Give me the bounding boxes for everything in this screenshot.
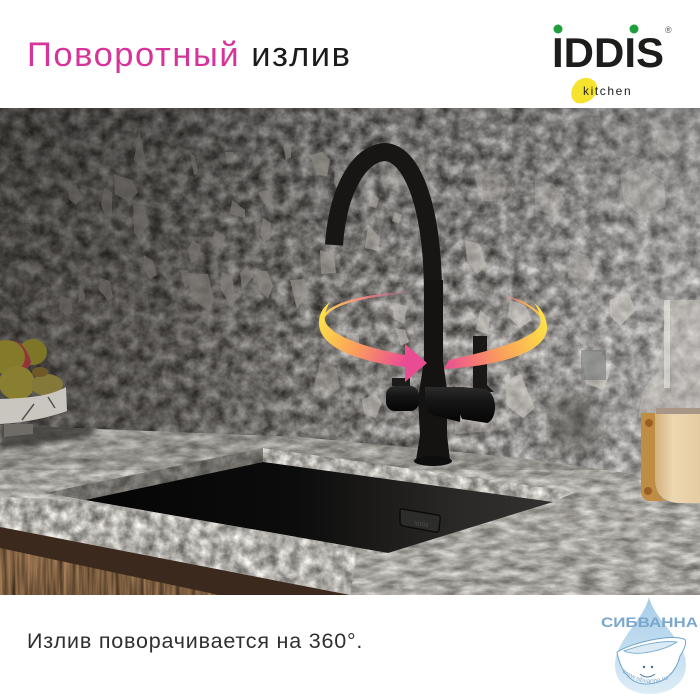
title: Поворотный излив: [27, 36, 351, 74]
ring back right: [508, 297, 544, 322]
logo green dots: [554, 24, 638, 34]
pears and apple: [0, 339, 63, 400]
dark wood cabinet band: [0, 527, 350, 595]
countertop shadow by the bowl: [0, 425, 98, 452]
grey tile fragment: [581, 350, 606, 380]
faucet: [334, 152, 495, 466]
jar contents: [656, 408, 700, 424]
left knob: [386, 378, 419, 411]
sink basin: [85, 462, 553, 553]
right arrow: [444, 303, 547, 369]
photo: kitchen scene: [0, 108, 700, 595]
countertop: [0, 425, 700, 595]
jar glass: [638, 300, 700, 418]
rivets: [644, 419, 653, 495]
fruit bowl: [0, 339, 67, 437]
yellow spot: [571, 78, 597, 103]
logo: IDDIS kitchen: [552, 24, 672, 103]
glass jar with leather strap: [638, 300, 700, 503]
faucet spout: [334, 152, 433, 290]
faucet column: [416, 280, 450, 460]
rotation arrow ring: [319, 292, 547, 382]
logo wordmark: IDDIS: [552, 29, 664, 76]
brand name: СИБВАННА: [601, 615, 698, 630]
registered mark: ®: [665, 25, 672, 35]
marble veins: [22, 397, 55, 420]
right lever: [473, 336, 494, 392]
sink drain plate: [400, 509, 440, 532]
water drop: [615, 597, 686, 694]
right handle body: [425, 387, 462, 422]
sink rear edge: [263, 448, 576, 502]
light wood cabinet: [0, 548, 219, 595]
watermark: Sibvanna logo: [601, 597, 698, 694]
left arrow: [319, 302, 427, 382]
sink left edge: [45, 448, 263, 500]
caption: Излив поворачивается на 360°.: [27, 629, 363, 653]
right handle cylinder: [459, 387, 495, 423]
stone backsplash wall: [0, 108, 700, 488]
bowl foot: [4, 424, 33, 437]
leather strap: [641, 413, 666, 501]
ring back left: [322, 292, 412, 322]
kitchen label: kitchen: [583, 84, 632, 98]
marble bowl rim: [0, 387, 67, 424]
sink drain plate: iddis: [414, 520, 429, 529]
wall shadow patch: [551, 395, 599, 453]
counter front face: [0, 497, 390, 595]
bathtub: [617, 638, 686, 684]
jar base: [655, 414, 700, 503]
website: www.sibvanna.ru: [622, 669, 668, 684]
faucet base: [414, 456, 452, 466]
